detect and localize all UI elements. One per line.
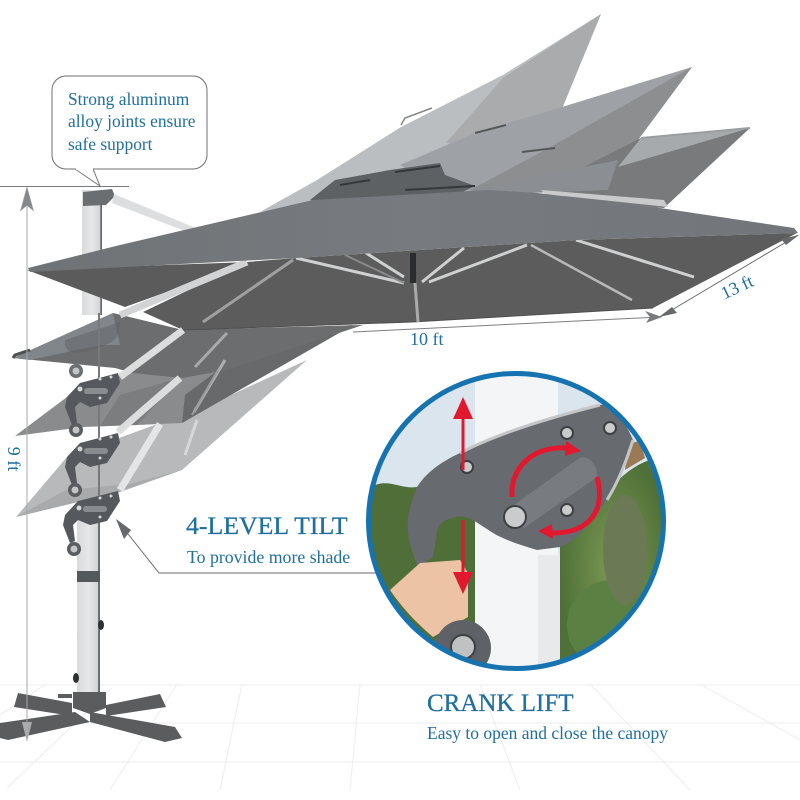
heading: 4-level tilt: 4-LEVEL TILT xyxy=(186,511,348,540)
callout: aluminium joints: safe support xyxy=(68,134,153,154)
label: 9 ft: 9 ft xyxy=(4,447,24,471)
crank arm xyxy=(507,457,597,528)
main canopy top surface xyxy=(28,190,798,272)
upper canopy tilt 3 xyxy=(470,128,750,208)
leader line to tilt handle xyxy=(116,519,376,573)
white pole xyxy=(475,370,558,672)
tilt ribs lower xyxy=(118,330,227,490)
height dimension xyxy=(0,186,129,742)
detail lens: crank xyxy=(365,370,670,680)
crank handle level 1 xyxy=(65,373,120,437)
depth dimension 13 ft xyxy=(659,235,799,317)
pole knobs xyxy=(73,620,104,683)
floor grid xyxy=(0,684,800,790)
crank plate xyxy=(408,405,633,567)
width dimension 10 ft xyxy=(353,311,662,332)
pole upper section xyxy=(82,190,102,315)
tilted canopy level 1 xyxy=(13,313,363,378)
callout: aluminium joints: Strong aluminum xyxy=(68,89,190,109)
main canopy underside xyxy=(27,233,797,330)
canopy vent flap xyxy=(310,163,475,204)
text: crank description: Easy to open and close the canopy xyxy=(427,723,668,743)
cross base xyxy=(0,692,182,742)
pole collar xyxy=(77,571,100,582)
plate bolts xyxy=(461,422,616,528)
callout: aluminium joints: alloy joints ensure xyxy=(68,111,196,131)
label: 10 ft: 10 ft xyxy=(410,329,444,349)
tilted canopy level 3 xyxy=(16,360,307,517)
heading: crank lift: CRANK LIFT xyxy=(427,690,574,717)
lens ring xyxy=(368,374,664,668)
wheel on highest tilt level xyxy=(69,364,83,378)
crank handle level 2 xyxy=(65,433,120,497)
wheel xyxy=(436,620,491,663)
crank handle level 3 xyxy=(63,491,120,556)
callout: aluminium joints xyxy=(52,76,207,186)
tilted canopy level 2 xyxy=(15,325,353,436)
hand xyxy=(390,560,468,637)
upper canopy tilt 1 xyxy=(260,14,601,212)
main canopy ribs xyxy=(120,240,694,322)
red motion arrows xyxy=(453,397,599,594)
text: tilt description: To provide more shade xyxy=(187,547,350,567)
greenery background xyxy=(371,441,661,660)
upper canopy tilt 2 xyxy=(400,67,692,195)
top aluminium joint xyxy=(83,189,198,233)
label: 13 ft: 13 ft xyxy=(718,271,756,303)
pole lower section xyxy=(77,510,100,692)
